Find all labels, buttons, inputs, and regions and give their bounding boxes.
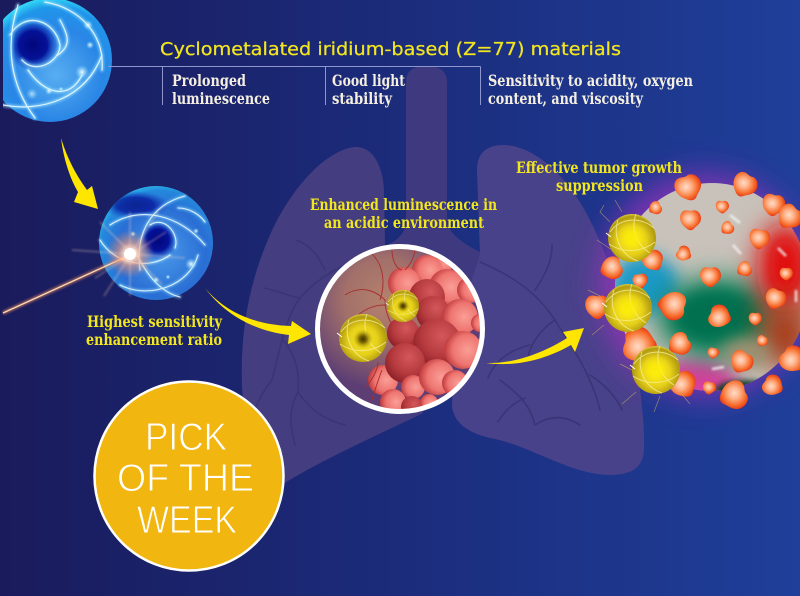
caption: highest sensitivity: enhancement ratio bbox=[86, 330, 222, 349]
right lung bbox=[452, 145, 644, 475]
caption: tumor growth suppression: Effective tumor growth bbox=[516, 158, 682, 177]
property: prolonged luminescence: luminescence bbox=[172, 89, 270, 108]
white ring bbox=[318, 246, 482, 412]
tumor cell bbox=[585, 169, 800, 414]
large nanoparticle bbox=[337, 314, 387, 362]
property: sensitivity: content, and viscosity bbox=[488, 89, 644, 108]
tumor colour patches bbox=[611, 215, 800, 411]
badge text bbox=[117, 416, 254, 542]
tumor spikes bbox=[585, 169, 800, 414]
sphere: iridium complex, top left bbox=[0, 0, 112, 122]
arrow: sphere to laser-activated sphere bbox=[61, 138, 98, 209]
tissue background bbox=[318, 247, 482, 411]
caption: highest sensitivity: Highest sensitivity bbox=[87, 312, 223, 331]
nanoparticles on tumor bbox=[602, 214, 680, 394]
caption: enhanced luminescence: Enhanced luminescence in bbox=[310, 195, 497, 214]
arrow: lung tissue to tumor bbox=[486, 328, 584, 364]
circular inset: lung tissue bbox=[318, 246, 489, 418]
caption: enhanced luminescence: an acidic environment bbox=[324, 213, 485, 232]
dark core bbox=[8, 22, 58, 70]
small nanoparticle bbox=[386, 290, 419, 322]
sparkle spots bbox=[130, 228, 199, 284]
title: Cyclometalated iridium-based (Z=77) materials bbox=[160, 39, 621, 60]
laser beam bbox=[3, 255, 130, 313]
bracket lines bbox=[108, 66, 480, 105]
lung veins bbox=[252, 240, 622, 445]
property: prolonged luminescence: Prolonged bbox=[172, 71, 246, 90]
badge disc bbox=[94, 382, 284, 570]
sphere body bbox=[99, 186, 213, 300]
trachea and bronchi bbox=[385, 66, 482, 320]
blood vessels bbox=[345, 250, 415, 400]
laser flare bbox=[72, 212, 185, 296]
orbit arcs bbox=[100, 196, 205, 297]
badge: pick of the week bbox=[94, 382, 284, 570]
caption: tumor growth suppression: suppression bbox=[556, 176, 643, 195]
sparkle spots bbox=[26, 20, 94, 100]
dark upper band and core bbox=[108, 192, 176, 259]
property: good light stability: Good light bbox=[332, 71, 406, 90]
left lung bbox=[242, 147, 423, 484]
badge text: PICK bbox=[145, 416, 227, 459]
light orbit arcs bbox=[3, 2, 102, 118]
badge text: WEEK bbox=[137, 499, 237, 542]
lungs illustration bbox=[242, 66, 644, 484]
property: sensitivity: Sensitivity to acidity, oxygen bbox=[488, 71, 693, 90]
sphere: laser-activated complex bbox=[99, 186, 213, 300]
alveoli cluster bbox=[368, 255, 480, 409]
property: good light stability: stability bbox=[332, 89, 393, 108]
arrow: sphere to lung tissue bbox=[205, 288, 311, 344]
badge text: OF THE bbox=[117, 457, 254, 500]
tumor body bbox=[615, 183, 800, 391]
sphere body bbox=[0, 0, 112, 122]
tumor glow bbox=[589, 163, 800, 407]
electric sparks around nanoparticles bbox=[588, 200, 690, 412]
